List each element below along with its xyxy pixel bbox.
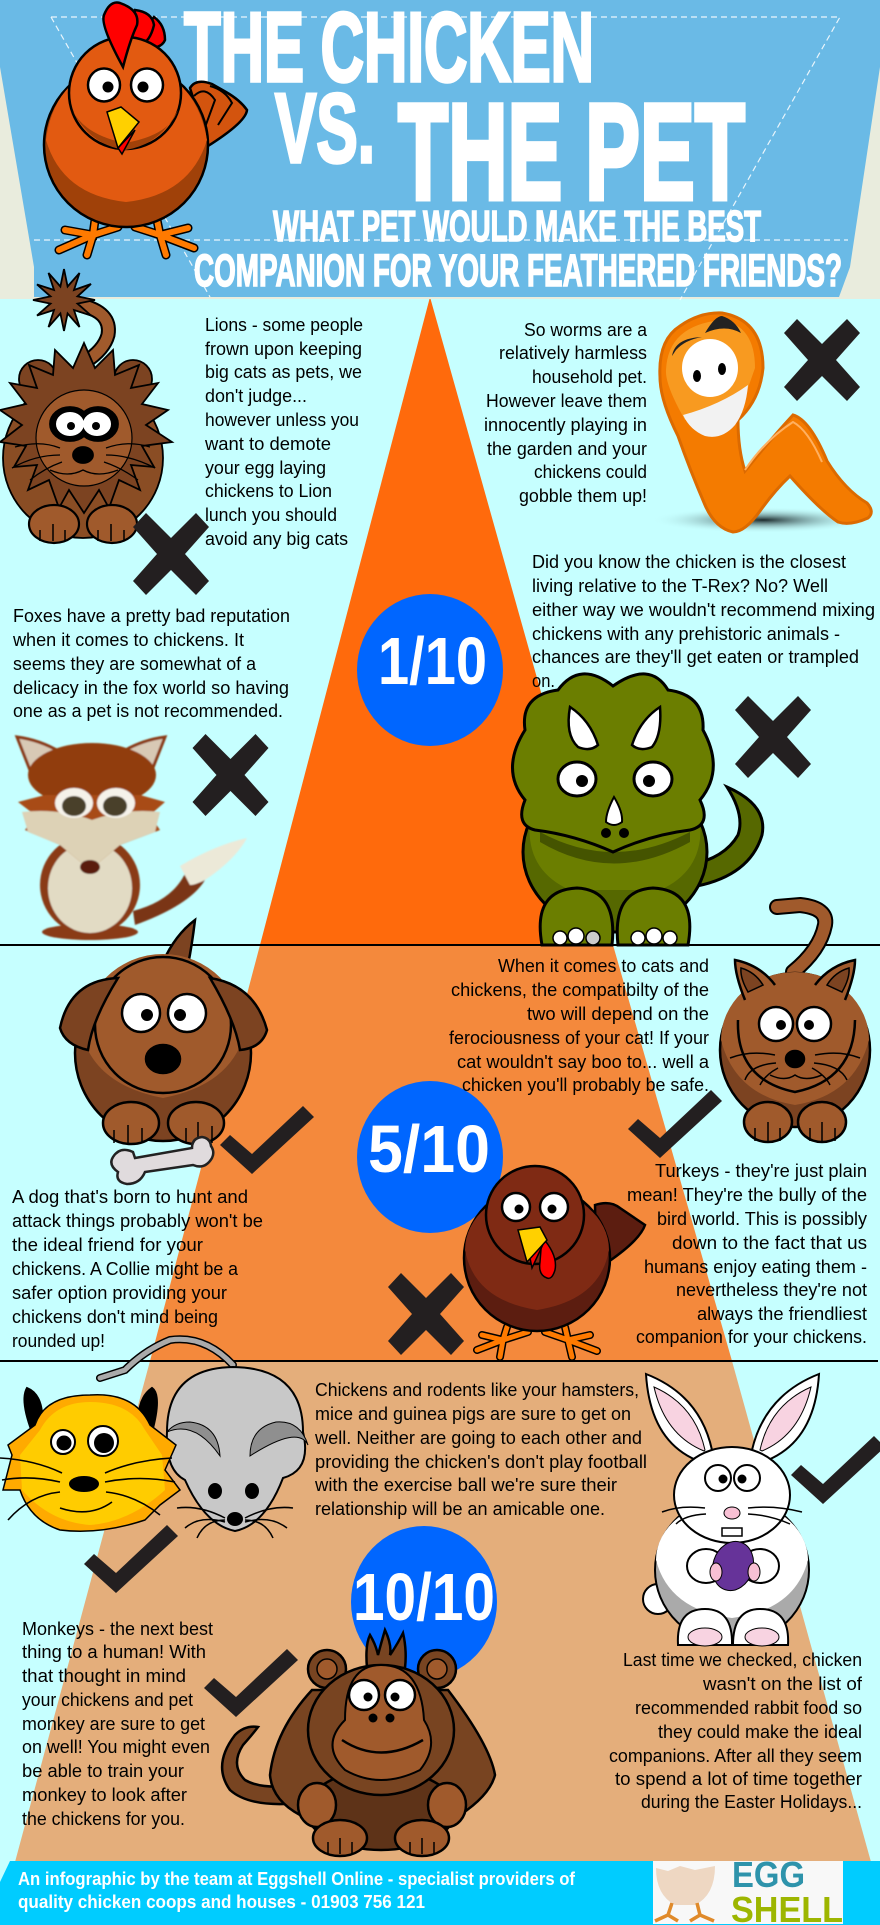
text: worms: So worms are a <box>524 320 648 340</box>
text: worms: relatively harmless <box>499 343 647 363</box>
score: 5/10 <box>357 1081 503 1233</box>
score: 1/10: 1/10 <box>378 624 487 699</box>
text: cats: two will depend on the <box>527 1004 709 1024</box>
text: dog: rounded up! <box>12 1331 105 1351</box>
text: rodents: relationship will be an amicable one. <box>315 1499 605 1519</box>
text: monkeys: your chickens and pet <box>22 1690 193 1710</box>
score: 10/10: 10/10 <box>353 1560 495 1635</box>
text: lions: however unless you <box>205 410 359 430</box>
section divider lines <box>0 945 880 1361</box>
text: rodents: providing the chicken's don't play football <box>315 1452 647 1472</box>
icon: bone <box>111 1137 213 1184</box>
text: lions: don't judge... <box>205 386 307 406</box>
icon: cross (worm) <box>784 319 860 401</box>
icon: hamster <box>0 1388 180 1531</box>
text: lions: Lions - some people <box>205 315 363 335</box>
text: t-rex: on. <box>532 671 555 691</box>
text: cats: When it comes to cats and <box>498 956 709 976</box>
text: lions <box>204 315 363 549</box>
text: dog: A dog that's born to hunt and <box>12 1187 248 1207</box>
text: lions: chickens to Lion <box>205 481 332 501</box>
footer band <box>0 1861 880 1925</box>
score: 10/10 <box>351 1526 497 1678</box>
text: cats: chicken you'll probably be safe. <box>462 1075 709 1095</box>
icon: cross (lion) <box>133 513 209 595</box>
text: turkeys: Turkeys - they're just plain <box>655 1161 867 1181</box>
text: foxes: delicacy in the fox world so having <box>13 678 289 698</box>
text: rabbits: wasn't on the list of <box>702 1674 863 1694</box>
text: monkeys: monkey are sure to get <box>22 1714 205 1734</box>
text: t-rex: living relative to the T-Rex? No? Well <box>532 576 828 596</box>
icon: cross (triceratops) <box>735 696 811 778</box>
text: monkeys: Monkeys - the next best <box>22 1619 213 1639</box>
text: worms: household pet. <box>532 367 647 387</box>
text: dog: safer option providing your <box>12 1283 227 1303</box>
text: lions: lunch you should <box>205 505 337 525</box>
icon: worm <box>651 313 875 533</box>
text: worms: innocently playing in <box>484 415 647 435</box>
text: worms: the garden and your <box>487 439 647 459</box>
icon: dog <box>60 920 267 1144</box>
icon: chicken <box>44 2 247 255</box>
text: rodents: mice and guinea pigs are sure to get on <box>315 1404 631 1424</box>
text: lions: your egg laying <box>205 458 326 478</box>
text: foxes: seems they are somewhat of a <box>13 654 257 674</box>
icon: check (monkey) <box>204 1649 298 1717</box>
text: t-rex: Did you know the chicken is the closest <box>532 552 846 572</box>
text: foxes: Foxes have a pretty bad reputation <box>13 606 290 626</box>
text: rabbits: during the Easter Holidays... <box>641 1792 862 1812</box>
icon: turkey <box>464 1166 645 1357</box>
text: turkeys: bird world. This is possibly <box>657 1209 867 1229</box>
icon: check (rabbit) <box>791 1436 880 1504</box>
text: dog: chickens. A Collie might be a <box>12 1259 239 1279</box>
icon: lion <box>0 269 172 543</box>
text: t-rex: chances are they'll get eaten or trampled <box>532 647 859 667</box>
text: turkeys: always the friendliest <box>697 1304 867 1324</box>
text: rodents: well. Neither are going to each other and <box>314 1428 642 1448</box>
text: lions: want to demote <box>204 434 331 454</box>
text: foxes: one as a pet is not recommended. <box>13 701 283 721</box>
logo: eggshell <box>653 1854 843 1925</box>
icon: check (cat) <box>628 1090 722 1158</box>
text: turkeys: companion for your chickens. <box>636 1327 867 1347</box>
icon: cat <box>720 905 870 1142</box>
text: lions: big cats as pets, we <box>205 362 362 382</box>
text: dog: attack things probably won't be <box>12 1211 263 1231</box>
pyramid: high compatibility band <box>15 1361 871 1862</box>
text: dog: the ideal friend for your <box>12 1235 203 1255</box>
title: VS. <box>275 73 375 183</box>
icon: monkey <box>222 1630 495 1856</box>
text: worms: However leave them <box>486 391 647 411</box>
header banner <box>0 0 880 300</box>
footer band: quality chicken coops and houses - 01903 756 121 <box>18 1892 425 1912</box>
text: rodents: Chickens and rodents like your hamsters, <box>315 1380 639 1400</box>
text: turkeys: humans enjoy eating them - <box>644 1257 867 1277</box>
text: turkeys: mean! They're the bully of the <box>627 1185 867 1205</box>
text: monkeys <box>22 1619 213 1829</box>
icon: check (hamster) <box>84 1525 178 1593</box>
score: 5/10: 5/10 <box>368 1112 490 1187</box>
text: rodents: with the exercise ball we're sure their <box>314 1475 617 1495</box>
text: monkeys: that thought in mind <box>22 1666 186 1686</box>
text: cats: cat wouldn't say boo to... well a <box>457 1052 710 1072</box>
text: cats: chickens, the compatibilty of the <box>451 980 709 1000</box>
text: monkeys: thing to a human! With <box>22 1642 206 1662</box>
text: worms <box>484 320 648 506</box>
text: rabbits: to spend a lot of time together <box>615 1769 862 1789</box>
text: lions: frown upon keeping <box>205 339 362 359</box>
text: monkeys: on well! You might even <box>22 1737 210 1757</box>
text: cats: ferociousness of your cat! If your <box>449 1028 709 1048</box>
text: rabbits <box>609 1650 863 1812</box>
text: foxes: when it comes to chickens. It <box>12 630 244 650</box>
pyramid: medium compatibility band <box>150 945 732 1361</box>
pyramid: low compatibility band <box>260 297 612 945</box>
logo: eggshell: EGG <box>732 1854 805 1895</box>
text: monkeys: the chickens for you. <box>22 1809 185 1829</box>
icon: fox <box>17 737 247 940</box>
icon: check (dog) <box>220 1106 314 1174</box>
text: dog <box>12 1187 263 1351</box>
text: worms: gobble them up! <box>519 486 647 506</box>
text: monkeys: monkey to look after <box>22 1785 187 1805</box>
text: rodents <box>314 1380 647 1519</box>
icon: triceratops <box>512 674 763 945</box>
text: rabbits: Last time we checked, chicken <box>623 1650 862 1670</box>
icon: cross (fox) <box>192 734 268 816</box>
title <box>184 0 842 296</box>
text: t-rex: chickens with any prehistoric animals - <box>532 624 840 644</box>
text: foxes <box>12 606 290 721</box>
text: worms: chickens could <box>534 462 647 482</box>
text: dog: chickens don't mind being <box>12 1307 218 1327</box>
score: 1/10 <box>357 594 503 746</box>
footer band: An infographic by the team at Eggshell Online - specialist providers of <box>18 1869 576 1889</box>
text: turkeys <box>627 1161 867 1347</box>
text: cats <box>449 956 710 1095</box>
text: monkeys: be able to train your <box>22 1761 184 1781</box>
icon: mouse <box>100 1339 308 1538</box>
text: rabbits: they could make the ideal <box>658 1722 862 1742</box>
text: t-rex <box>532 552 875 691</box>
text: t-rex: either way we wouldn't recommend mixing <box>532 600 875 620</box>
text: lions: avoid any big cats <box>205 529 348 549</box>
text: rabbits: recommended rabbit food so <box>635 1698 862 1718</box>
text: turkeys: nevertheless they're not <box>676 1280 867 1300</box>
text: rabbits: companions. After all they seem <box>609 1746 862 1766</box>
icon: rabbit <box>643 1374 819 1646</box>
icon: cross (turkey) <box>388 1273 464 1355</box>
text: turkeys: down to the fact that us <box>672 1233 867 1253</box>
